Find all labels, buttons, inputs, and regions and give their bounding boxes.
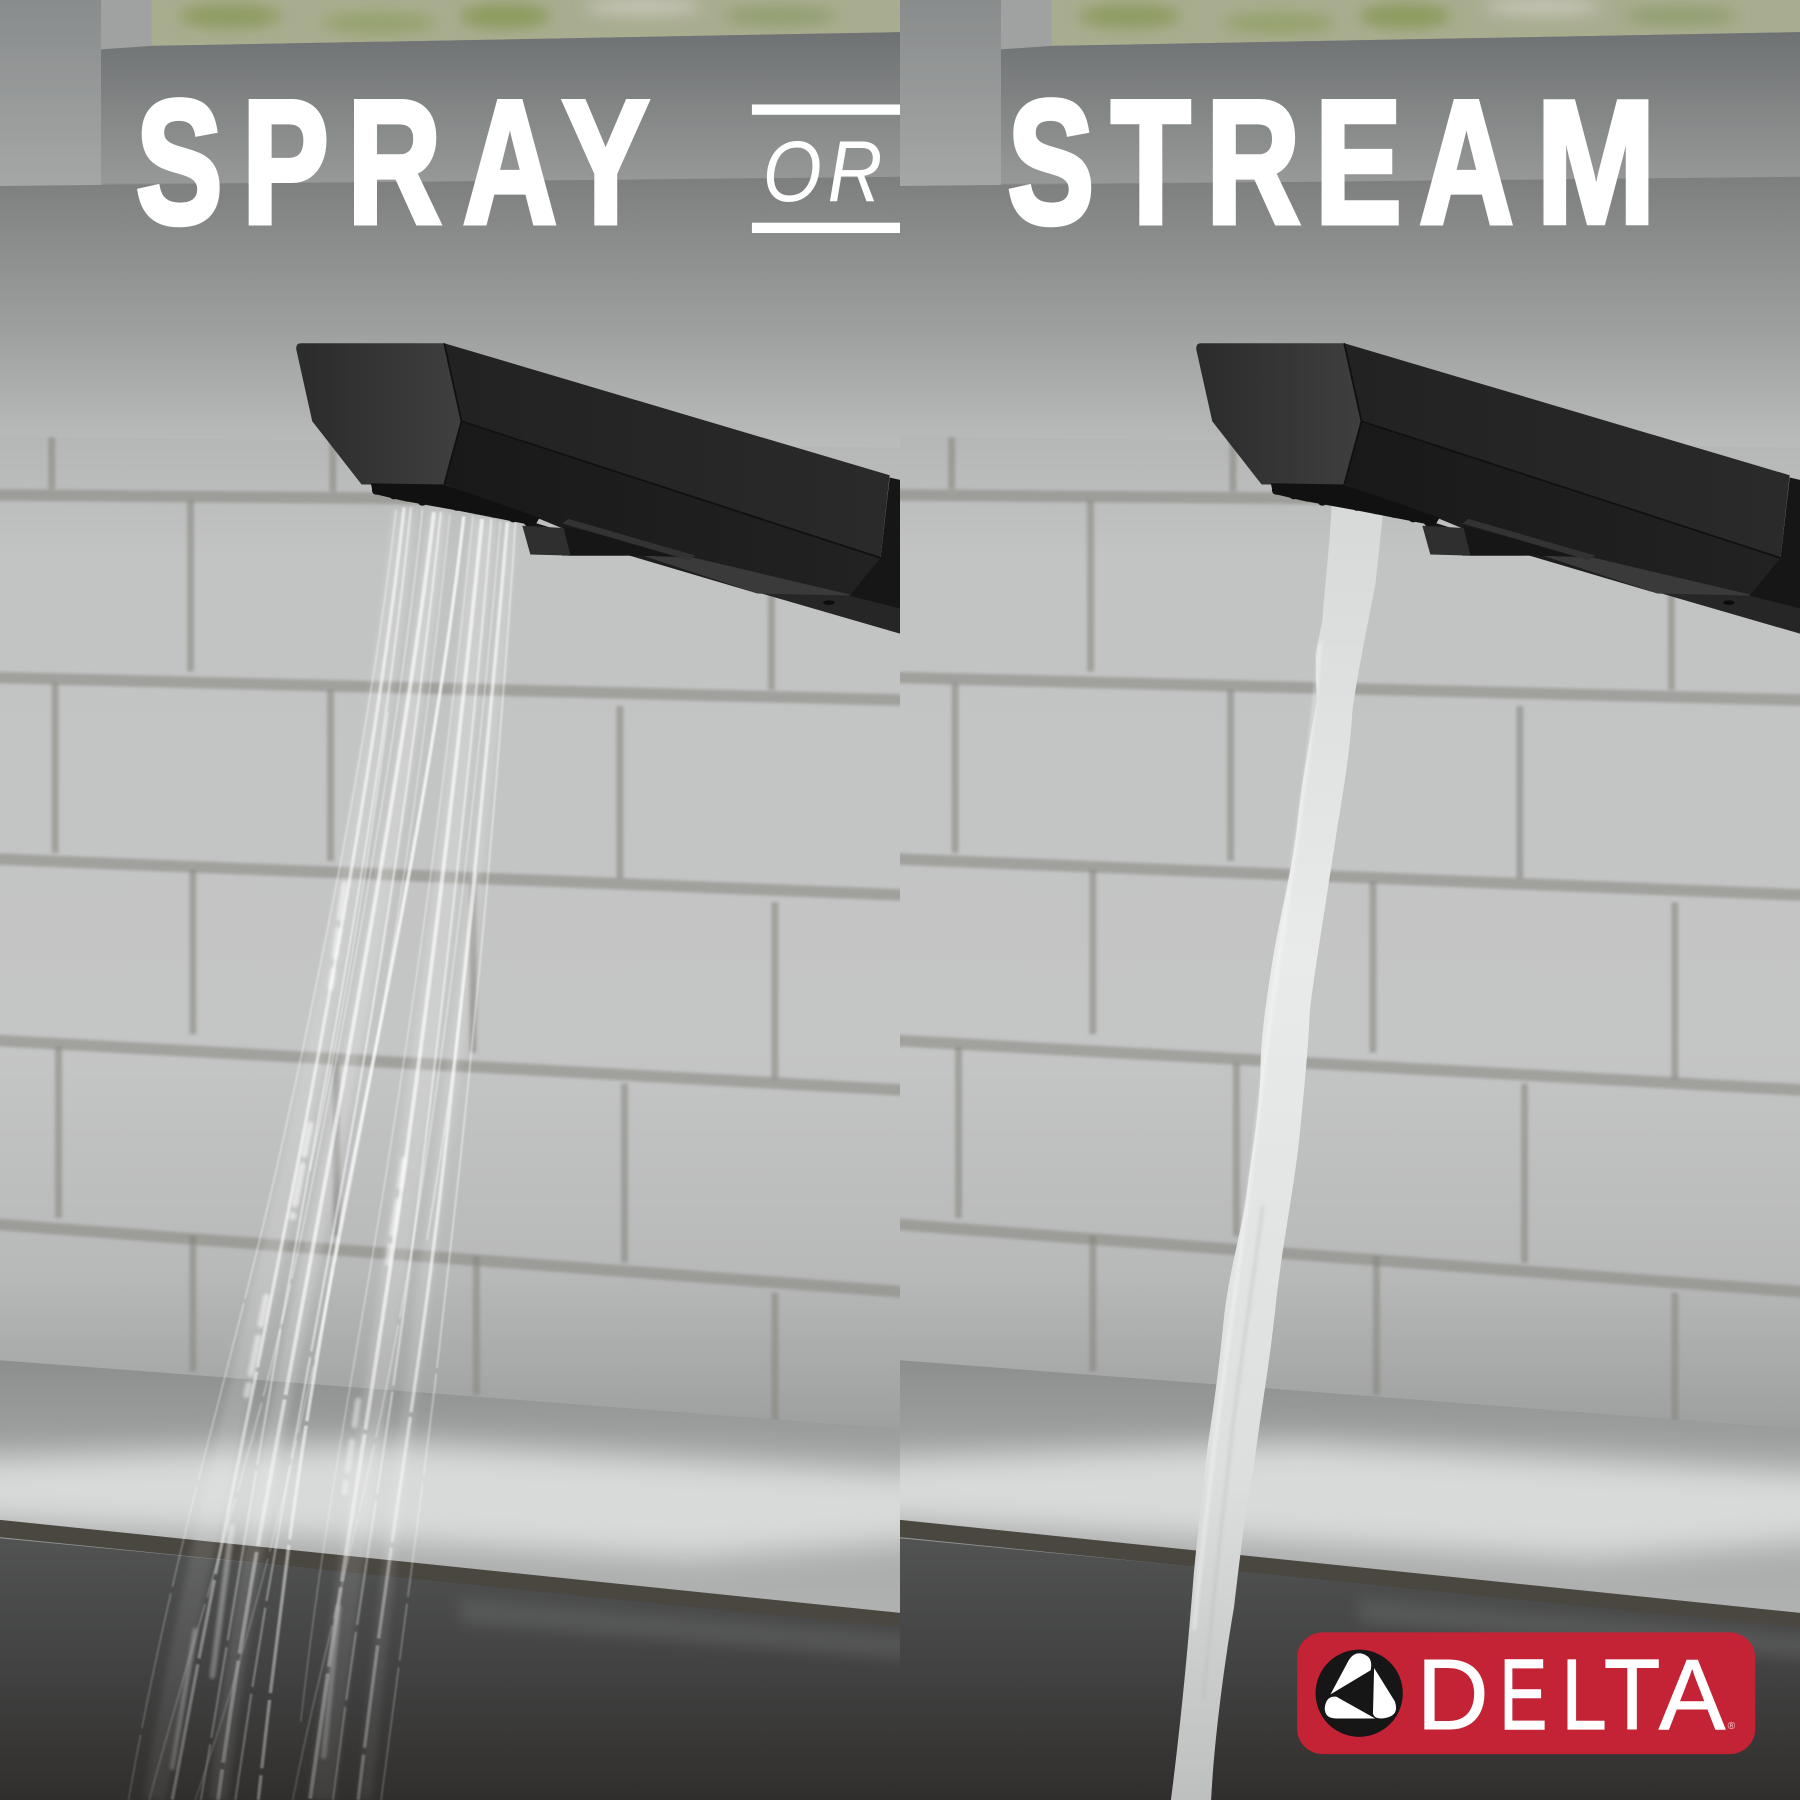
wordmark: DELTA: E: [1499, 1639, 1547, 1751]
panel: stream mode: [831, 0, 1800, 1800]
wordmark: DELTA: A: [1659, 1640, 1726, 1751]
faucet stream head: [1196, 343, 1800, 634]
divider label: or: [752, 104, 900, 233]
faucet spray head: [296, 343, 900, 634]
photo background: kitchen wall, tile, counter and sink: [0, 0, 969, 1800]
wordmark: DELTA: L: [1561, 1639, 1607, 1751]
wordmark: DELTA: T: [1604, 1640, 1660, 1751]
panel: spray mode: [0, 0, 969, 1800]
heading: stream: M: [1536, 65, 1656, 261]
photo background: kitchen wall, tile, counter and sink: [831, 0, 1800, 1800]
wordmark: DELTA: [1417, 1639, 1736, 1751]
bright water sparkles: [172, 884, 404, 1768]
wordmark: DELTA: D: [1417, 1640, 1489, 1751]
icon: Delta triangle mark: [1316, 1650, 1403, 1737]
water stream: [1171, 503, 1383, 1800]
heading: spray: SPRAY: [136, 64, 649, 260]
water spray: [129, 507, 515, 1800]
heading: stream: STREA: [1007, 64, 1513, 260]
divider label: or: OR: [763, 124, 888, 220]
wordmark: DELTA: ®: [1728, 1721, 1736, 1732]
logo: Delta: [1297, 1632, 1755, 1754]
milky water ribbons: [155, 511, 511, 1800]
